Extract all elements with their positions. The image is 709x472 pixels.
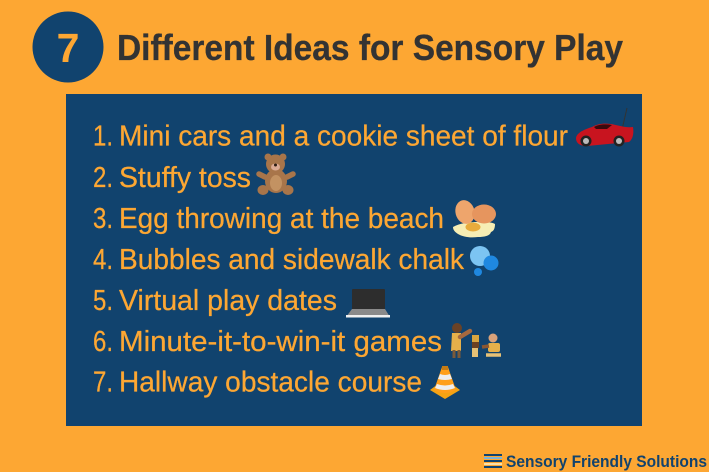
number badge: 7	[57, 25, 79, 71]
item 2: Stuffy toss	[119, 162, 251, 194]
footer brand logo	[484, 452, 707, 471]
item 1: 1.	[93, 120, 113, 152]
icon: children playing with blocks	[451, 323, 501, 358]
item 3: 3.	[93, 203, 113, 235]
panel: ideas list	[66, 94, 642, 426]
title: Different Ideas for Sensory Play	[117, 27, 623, 68]
item 1: Mini cars and a cookie sheet of flour	[119, 120, 568, 152]
icon: red toy car	[576, 108, 633, 146]
icon: bubbles	[470, 246, 498, 276]
icon: teddy bear	[258, 154, 294, 195]
item 6: Minute-it-to-win-it games	[119, 326, 442, 358]
icon: laptop	[346, 289, 390, 318]
item 5: Virtual play dates	[119, 285, 337, 317]
item 3: Egg throwing at the beach	[119, 203, 444, 235]
icon: brand stripes	[484, 454, 502, 468]
icon: eggs	[453, 198, 496, 237]
item 6: 6.	[93, 326, 113, 358]
icon: traffic cone	[430, 366, 460, 399]
item 4: 4.	[93, 244, 113, 276]
item 7: Hallway obstacle course	[119, 366, 422, 398]
number badge	[32, 12, 104, 82]
item 5: 5.	[93, 285, 113, 317]
item 4: Bubbles and sidewalk chalk	[119, 244, 465, 276]
item 7: 7.	[93, 366, 113, 398]
item 2: 2.	[93, 162, 113, 194]
